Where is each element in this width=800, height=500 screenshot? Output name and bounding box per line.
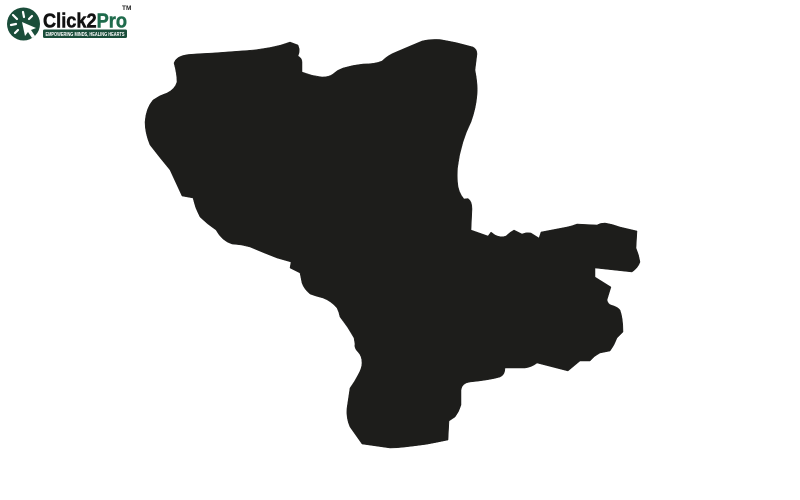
logo wordmark: Click2Pro xyxy=(43,10,127,32)
logo: Click2Pro xyxy=(7,5,131,40)
logo tagline bar: EMPOWERING MINDS, HEALING HEARTS xyxy=(46,32,125,38)
trademark: TM xyxy=(122,5,131,12)
map silhouette xyxy=(145,39,640,448)
icon: logo circle with cursor xyxy=(7,8,40,40)
